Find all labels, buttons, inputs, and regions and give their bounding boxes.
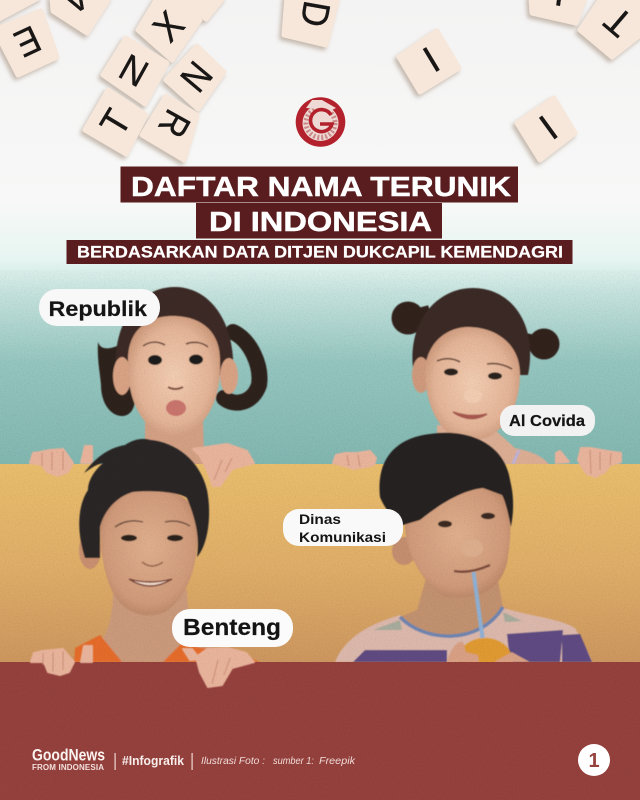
face: [425, 327, 520, 440]
face: [100, 490, 198, 615]
background gradient: [0, 0, 640, 464]
title block: [66, 166, 572, 264]
footer photo credit: [201, 756, 356, 767]
nose: [461, 539, 483, 557]
girl hands: [30, 444, 621, 486]
tile letters: N: [112, 46, 155, 95]
brows: [437, 359, 512, 369]
orange shirt: [74, 635, 260, 662]
ear: [412, 357, 430, 393]
hair: [79, 439, 209, 558]
lips: [166, 400, 186, 416]
boy left: [74, 439, 260, 662]
title line 2: DI INDONESIA: [209, 206, 432, 237]
footer photo credit: Freepik: [319, 756, 356, 767]
title line 2: [196, 203, 442, 238]
boy right: [335, 433, 592, 662]
shirt stripes: [353, 612, 592, 662]
tile letters: I: [532, 108, 566, 148]
footer band: [0, 662, 640, 800]
page number badge: [578, 744, 610, 776]
neck: [400, 575, 503, 637]
nose: [142, 562, 163, 566]
tile letters: T: [91, 102, 139, 143]
footer brand: FROM INDONESIA: [32, 763, 104, 772]
footer photo credit: Ilustrasi Foto :: [201, 756, 265, 767]
finger gaps: [43, 651, 230, 684]
right braid: [224, 332, 259, 403]
tile letters: N: [172, 53, 221, 100]
eyes: [148, 355, 162, 365]
grain overlay: [0, 270, 640, 800]
strap: [513, 450, 519, 464]
brows: [115, 521, 190, 527]
name bubble: Dinas Komunikasi: Dinas: [299, 512, 341, 527]
hand shapes: [30, 444, 621, 486]
brows: [143, 342, 208, 347]
nose: [464, 389, 482, 403]
straw and orange: [447, 572, 530, 686]
footer photo credit: sumber 1:: [273, 756, 314, 767]
collar: [400, 607, 503, 636]
name bubble: Al Covida: [500, 405, 595, 436]
name bubble: Republik: Republik: [48, 298, 147, 321]
ears: [113, 357, 131, 395]
ear: [79, 531, 101, 569]
name bubble: Dinas Komunikasi: [283, 509, 403, 546]
neck and chest: [135, 420, 210, 466]
orange fruit: [457, 638, 513, 686]
left braid: [98, 342, 135, 416]
title line 1: DAFTAR NAMA TERUNIK: [131, 171, 511, 202]
fingers on fruit: [447, 642, 530, 662]
name bubble: Al Covida: Al Covida: [509, 413, 585, 430]
tile letters: E: [8, 17, 47, 66]
tile letters: [8, 0, 640, 148]
footer hashtag: [114, 753, 193, 770]
name bubble: Dinas Komunikasi: Komunikasi: [299, 530, 386, 545]
buns: [408, 312, 543, 344]
girl with buns: [392, 288, 560, 466]
girl with braids: [98, 287, 259, 466]
smile: [129, 579, 172, 586]
eyes: [438, 521, 452, 527]
neck and chest: [437, 425, 550, 466]
footer hashtag: #Infografik: [122, 754, 184, 768]
hair: [116, 287, 233, 375]
eyes: [444, 368, 458, 376]
tile letters: X: [144, 3, 192, 50]
straw: [474, 572, 482, 638]
hair: [379, 433, 513, 527]
eyes: [121, 535, 137, 541]
letter tiles: [0, 0, 640, 160]
name bubble: Benteng: [172, 609, 293, 647]
footer brand: [32, 746, 105, 772]
face: [405, 484, 510, 598]
footer brand: GoodNews: [32, 746, 105, 764]
smile: [453, 412, 487, 419]
name bubble: Republik: [39, 289, 160, 326]
ear: [392, 537, 416, 565]
name bubble: Benteng: Benteng: [183, 614, 281, 640]
nose: [165, 378, 185, 390]
logo badge: [296, 97, 345, 147]
subtitle: BERDASARKAN DATA DITJEN DUKCAPIL KEMENDAGRI: [77, 242, 563, 262]
shirt: [335, 605, 592, 662]
page number badge: 1: [588, 750, 600, 772]
tile letters: R: [150, 103, 199, 144]
face: [128, 316, 220, 436]
finger gaps: [42, 450, 611, 480]
mouth: [454, 565, 490, 572]
sand wall: [0, 464, 640, 662]
neck and chest: [85, 590, 240, 662]
boy hands: [31, 646, 254, 687]
hand shapes: [31, 646, 254, 687]
hair: [412, 288, 530, 375]
tile letters: I: [416, 40, 447, 81]
